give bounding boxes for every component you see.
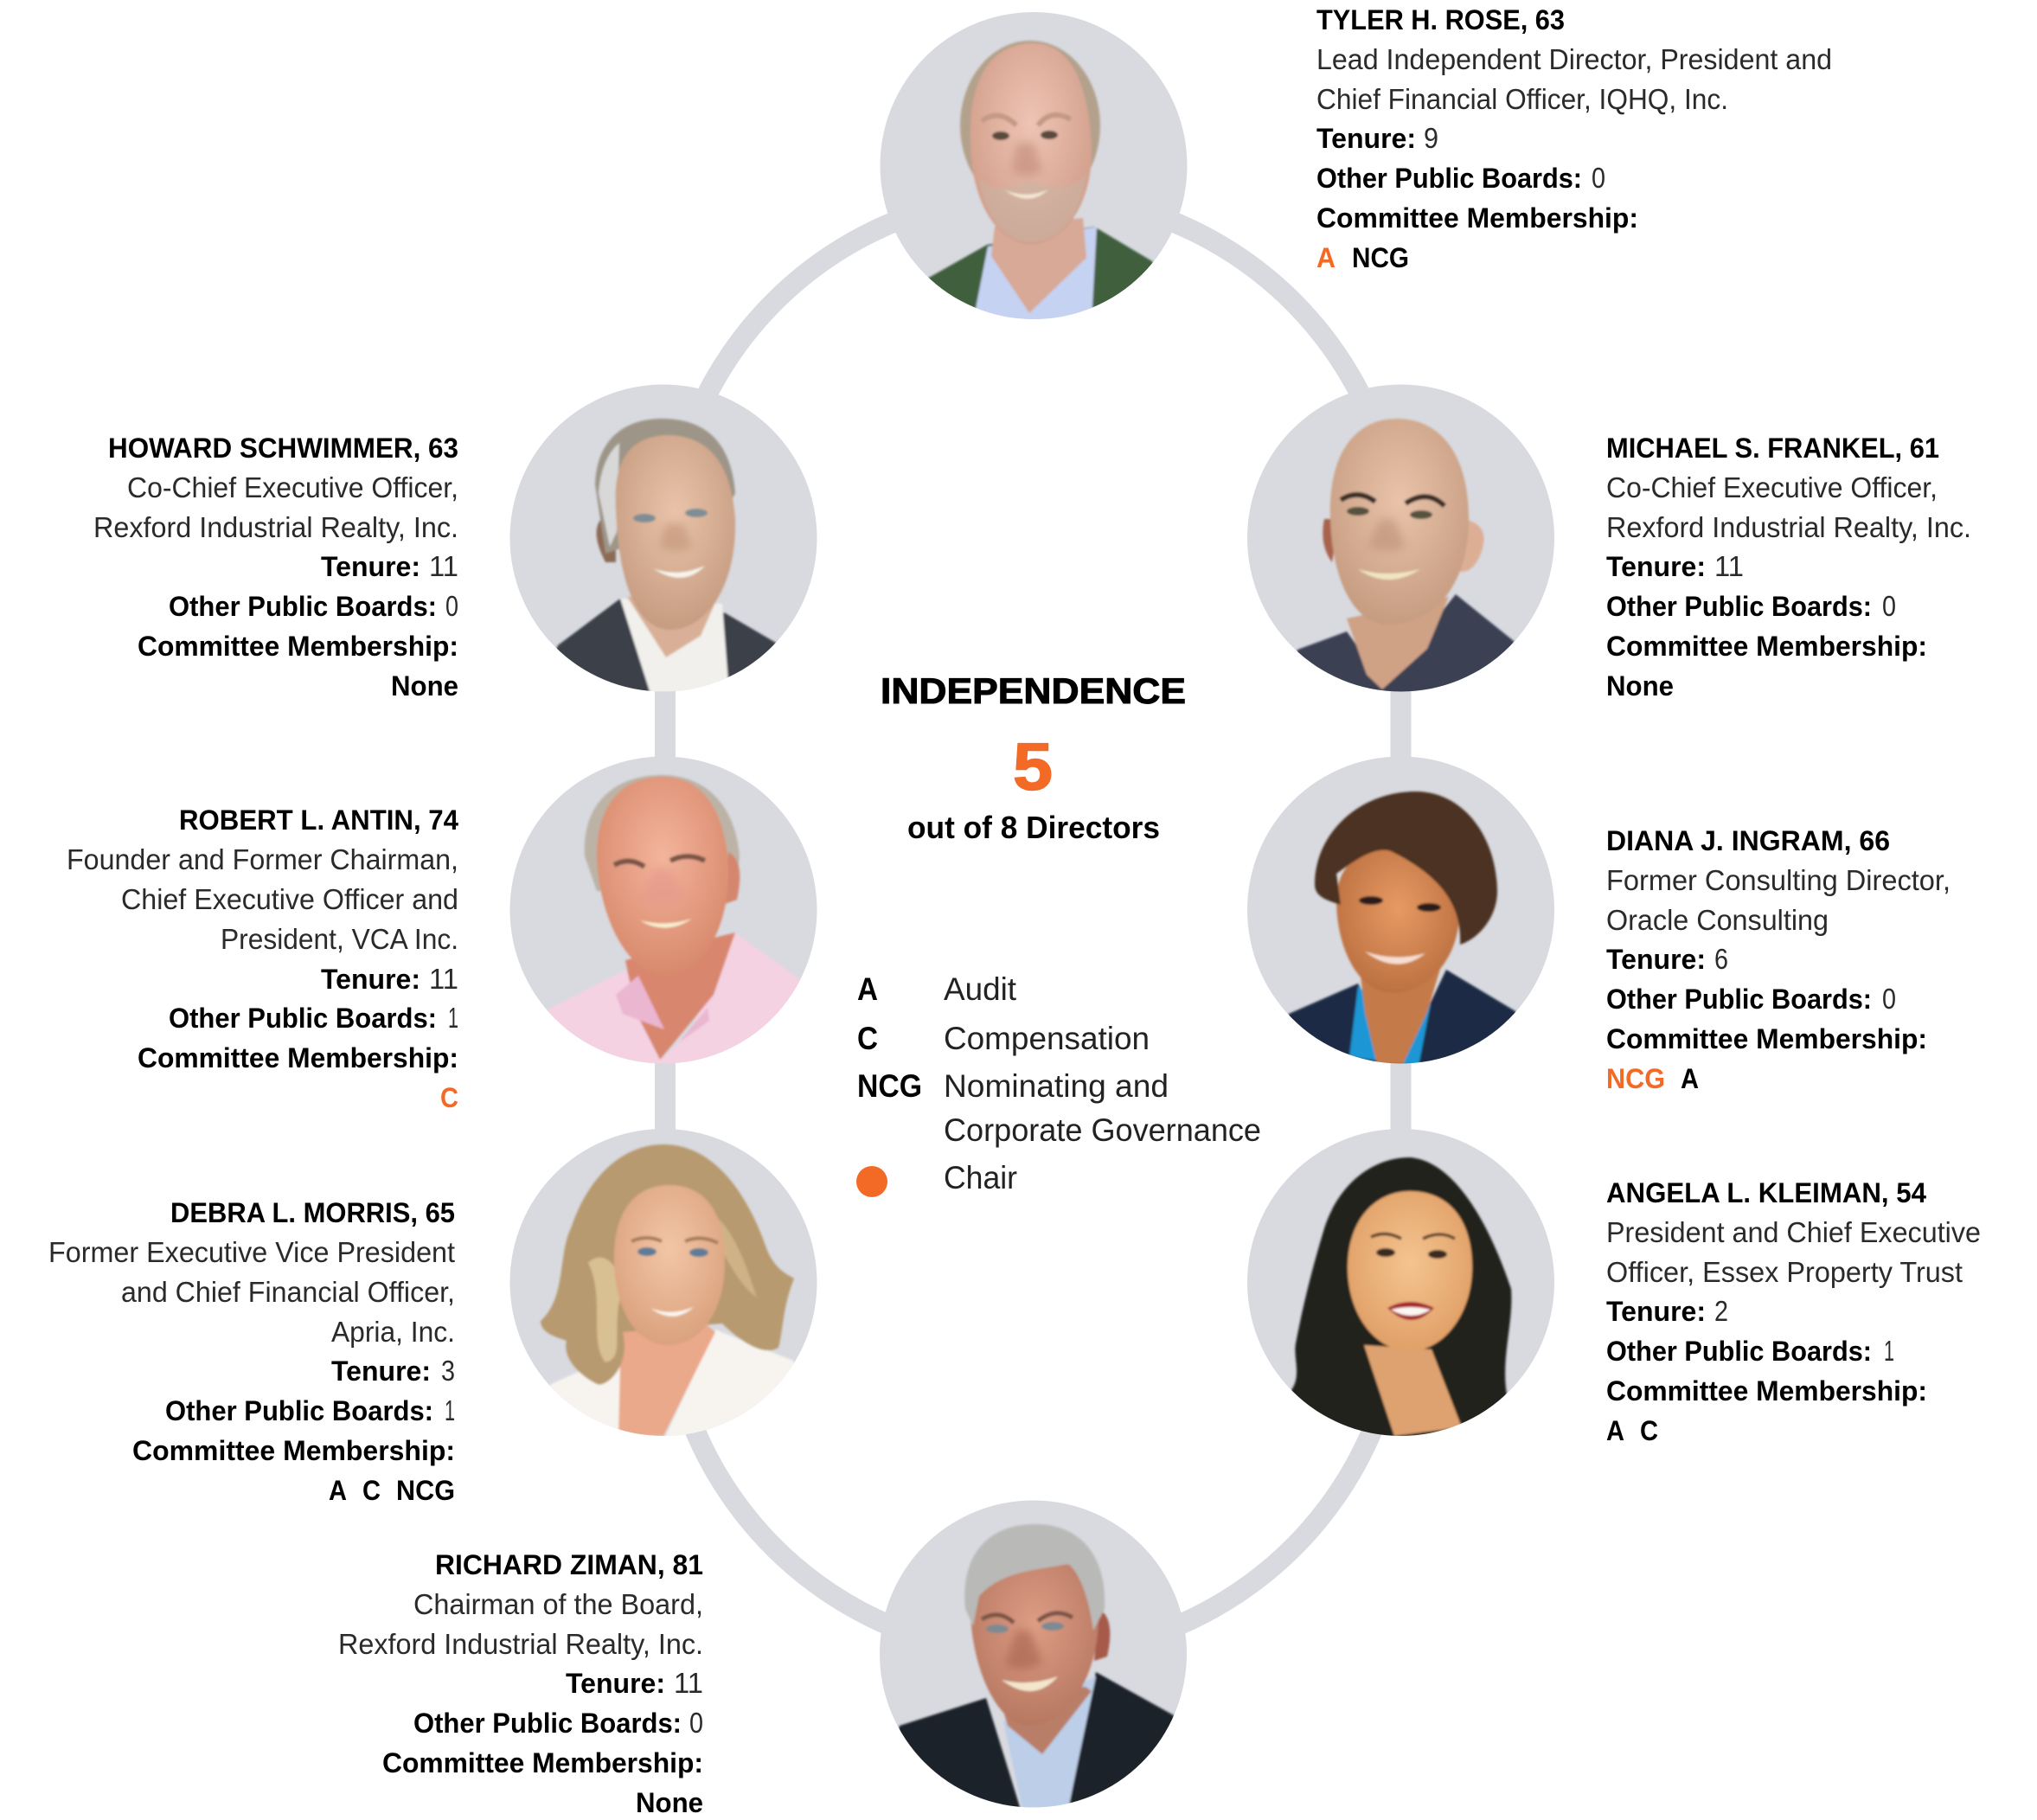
text: Robert L. Antin: Founder and Former Chairman, (67, 843, 458, 875)
text: Robert L. Antin: Committee Membership: (138, 1042, 458, 1073)
heading: independence: 5 (1013, 730, 1053, 804)
text: Howard Schwimmer: Rexford Industrial Realty, Inc. (93, 511, 458, 543)
text: Diana J. Ingram: Oracle Consulting (1606, 904, 1829, 936)
text: Michael S. Frankel: 0 (1882, 590, 1896, 622)
text: Michael S. Frankel: 11 (1714, 550, 1744, 582)
heading: independence: out of 8 Directors (907, 810, 1160, 845)
text: Diana J. Ingram: 0 (1882, 983, 1896, 1015)
text: Howard Schwimmer: None (391, 670, 458, 702)
heading: independence: INDEPENDENCE (881, 670, 1186, 711)
text: Tyler H. Rose: NCG (1352, 242, 1409, 273)
legend: A (857, 971, 878, 1007)
legend: Chair (944, 1160, 1017, 1195)
text: Tyler H. Rose: Lead Independent Director, President and (1316, 43, 1832, 75)
text: Robert L. Antin: 11 (429, 963, 458, 995)
text: Tyler H. Rose: A (1316, 242, 1336, 273)
text: Howard Schwimmer: HOWARD SCHWIMMER, 63 (108, 433, 458, 464)
text: Debra L. Morris: 3 (441, 1355, 455, 1387)
portrait: Howard Schwimmer (509, 384, 817, 696)
connector ring (665, 195, 1401, 1655)
text: Angela L. Kleiman: 2 (1714, 1295, 1728, 1327)
text: Howard Schwimmer (93, 433, 458, 702)
text: Howard Schwimmer: 11 (429, 550, 458, 582)
text: Angela L. Kleiman: Other Public Boards: (1606, 1336, 1872, 1367)
text: Tyler H. Rose: Other Public Boards: (1316, 163, 1582, 194)
text: Angela L. Kleiman: President and Chief Executive (1606, 1216, 1981, 1248)
text: Angela L. Kleiman: Tenure: (1606, 1296, 1706, 1327)
text: Richard Ziman: None (636, 1787, 703, 1818)
text: Michael S. Frankel: Tenure: (1606, 551, 1706, 582)
text: Debra L. Morris: and Chief Financial Officer, (121, 1276, 455, 1308)
text: Richard Ziman: RICHARD ZIMAN, 81 (435, 1549, 703, 1580)
text: Debra L. Morris: Apria, Inc. (331, 1316, 455, 1348)
text: Angela L. Kleiman: C (1640, 1415, 1658, 1446)
text: Michael S. Frankel: None (1606, 670, 1674, 702)
legend: Corporate Governance (944, 1112, 1261, 1148)
text: Debra L. Morris: DEBRA L. MORRIS, 65 (170, 1197, 455, 1228)
text: Tyler H. Rose: TYLER H. ROSE, 63 (1316, 4, 1565, 35)
text: Michael S. Frankel: MICHAEL S. FRANKEL, 61 (1606, 433, 1939, 464)
text: Angela L. Kleiman (1606, 1177, 1981, 1446)
portrait: Michael S. Frankel (1246, 384, 1554, 696)
legend: Audit (944, 971, 1017, 1007)
portrait: Debra L. Morris (509, 1128, 830, 1440)
text: Tyler H. Rose: 0 (1592, 162, 1605, 194)
text: Angela L. Kleiman: Committee Membership: (1606, 1375, 1927, 1407)
text: Michael S. Frankel: Committee Membership: (1606, 631, 1927, 662)
legend: Compensation (944, 1021, 1150, 1056)
text: Debra L. Morris: A (329, 1475, 347, 1506)
text: Robert L. Antin: ROBERT L. ANTIN, 74 (179, 804, 458, 836)
text: Robert L. Antin: President, VCA Inc. (221, 923, 458, 955)
text: Tyler H. Rose (1316, 4, 1832, 273)
portrait: Robert L. Antin (509, 756, 822, 1068)
text: Robert L. Antin: C (440, 1082, 458, 1113)
text: Michael S. Frankel: Co-Chief Executive Officer, (1606, 471, 1938, 503)
text: Debra L. Morris: Former Executive Vice President (48, 1236, 455, 1268)
portrait: Richard Ziman (874, 1500, 1198, 1812)
text: Tyler H. Rose: Tenure: (1316, 123, 1416, 154)
text: Michael S. Frankel: Rexford Industrial Realty, Inc. (1606, 511, 1971, 543)
text: Diana J. Ingram: DIANA J. INGRAM, 66 (1606, 825, 1890, 856)
text: Debra L. Morris: C (362, 1475, 381, 1506)
text: Diana J. Ingram: NCG (1606, 1063, 1665, 1094)
text: Debra L. Morris: Other Public Boards: (165, 1395, 433, 1426)
text: Angela L. Kleiman: Officer, Essex Property Trust (1606, 1256, 1963, 1288)
text: Diana J. Ingram: Other Public Boards: (1606, 984, 1872, 1015)
text: Debra L. Morris: 1 (445, 1394, 455, 1426)
text: Howard Schwimmer: Co-Chief Executive Officer, (127, 471, 458, 503)
legend (856, 971, 1261, 1197)
text: Robert L. Antin (67, 804, 458, 1113)
text: Debra L. Morris: Committee Membership: (132, 1435, 455, 1466)
text: Howard Schwimmer: Other Public Boards: (169, 591, 437, 622)
text: Richard Ziman: 0 (689, 1707, 703, 1739)
text: Angela L. Kleiman: 1 (1884, 1335, 1894, 1367)
text: Tyler H. Rose: Chief Financial Officer, IQHQ, Inc. (1316, 83, 1728, 115)
legend: C (857, 1021, 878, 1056)
text: Richard Ziman: 11 (674, 1667, 703, 1699)
text: Angela L. Kleiman: A (1606, 1415, 1624, 1446)
text: Richard Ziman: Rexford Industrial Realty, Inc. (338, 1628, 703, 1660)
text: Diana J. Ingram: 6 (1714, 943, 1728, 975)
portrait: Angela L. Kleiman (1246, 1128, 1554, 1440)
text: Robert L. Antin: 1 (448, 1002, 458, 1034)
text: Robert L. Antin: Tenure: (321, 964, 420, 995)
text: Tyler H. Rose: Committee Membership: (1316, 202, 1638, 234)
text: Debra L. Morris: Tenure: (331, 1355, 431, 1387)
portrait: Tyler H. Rose (878, 12, 1189, 322)
text: Michael S. Frankel (1606, 433, 1971, 702)
text: Diana J. Ingram: Committee Membership: (1606, 1023, 1927, 1054)
text: Angela L. Kleiman: ANGELA L. KLEIMAN, 54 (1606, 1177, 1926, 1208)
text: Diana J. Ingram (1606, 825, 1951, 1094)
text: Richard Ziman (338, 1549, 703, 1818)
text: Diana J. Ingram: Tenure: (1606, 944, 1706, 975)
text: Howard Schwimmer: Tenure: (321, 551, 420, 582)
heading: independence (881, 670, 1186, 845)
portrait: Diana J. Ingram (1246, 756, 1554, 1068)
text: Debra L. Morris: NCG (396, 1475, 455, 1506)
text: Diana J. Ingram: Former Consulting Director, (1606, 864, 1951, 896)
text: Tyler H. Rose: 9 (1424, 122, 1438, 154)
text: Howard Schwimmer: 0 (445, 590, 458, 622)
text: Diana J. Ingram: A (1681, 1063, 1699, 1094)
legend: Nominating and (944, 1068, 1169, 1104)
text: Michael S. Frankel: Other Public Boards: (1606, 591, 1872, 622)
text: Richard Ziman: Tenure: (566, 1668, 665, 1699)
text: Howard Schwimmer: Committee Membership: (138, 631, 458, 662)
text: Debra L. Morris (48, 1197, 455, 1506)
text: Robert L. Antin: Other Public Boards: (169, 1003, 437, 1034)
text: Richard Ziman: Committee Membership: (382, 1747, 703, 1778)
text: Richard Ziman: Chairman of the Board, (413, 1588, 703, 1620)
text: Richard Ziman: Other Public Boards: (413, 1708, 682, 1739)
text: Robert L. Antin: Chief Executive Officer and (121, 883, 458, 915)
legend: NCG (857, 1068, 922, 1104)
